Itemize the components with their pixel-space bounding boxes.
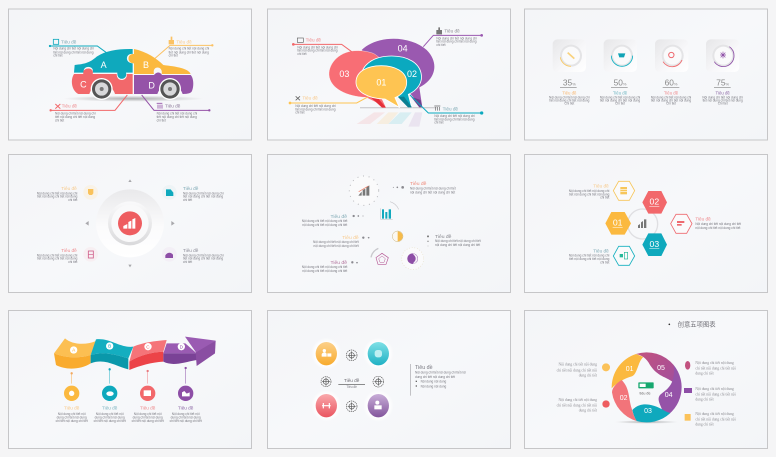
text top: chi tiết [600,196,609,200]
text top [569,184,610,200]
outline hexagon right [671,214,692,233]
callout 01: Tiêu đề [302,96,318,101]
card 50% [600,39,641,106]
text bottom: Tiêu đề [593,248,609,253]
pentagon icon [371,248,388,264]
hexagon 03 [642,233,667,256]
right item 3: dung chi tiết [695,423,714,427]
callout C: Tiêu đề [62,104,77,109]
callout 02: tiết nội dung chi tiết nội dung [434,117,475,121]
item 3 dots [362,236,369,239]
text bottom: Nội dung chi tiết nội dung chi [569,254,610,258]
item 1 text: nội dung chi tiết nội dung chi tiết [410,190,455,194]
moon icon [402,248,424,270]
right item 2: dung chi tiết [695,398,714,402]
item bottom-right [162,247,224,264]
text bottom [569,248,610,264]
text top: tiết nội dung chi tiết nội dung [569,192,610,196]
item 2 text: Nội dung chi tiết nội dung chi tiết [302,219,347,223]
item bottom-left: Tiêu đề [61,248,77,253]
right item 1: Nội dung chi tiết nội dung [695,361,734,365]
callout D [157,103,197,122]
card 35%: 35% [563,78,576,88]
item bottom-left: Nội dung chi tiết nội dung chi [37,253,78,257]
segment numbers: 01 [626,366,634,373]
right text block: Tiêu đề [415,365,433,371]
right item 2: Nội dung chi tiết nội dung [695,387,734,391]
item top-left: Tiêu đề [61,186,77,191]
item 3 text: nội dung chi tiết nội dung chi tiết [314,244,359,248]
callout C: Nội dung chi tiết nội dung chi [55,111,96,115]
callout 04: tiết nội dung chi tiết nội dung [436,40,477,44]
segment 04 [659,365,682,418]
left item 01: dung chi tiết [579,374,597,378]
card 60%: Chi tiết [666,102,676,106]
item 3 text: Tiêu đề [342,235,359,241]
car letters: C [80,79,87,89]
wheels [91,78,181,100]
step B: Tiêu đề [102,406,118,411]
text bottom: tiết nội dung chi tiết nội dung [569,257,610,261]
item top-left [37,185,98,202]
card 60% [651,39,692,106]
card 75%: tiết nội dung chi tiết nội dung [703,99,743,103]
callout A: tiết nội dung chi tiết nội dung [53,50,94,54]
bubble 01 [356,66,407,107]
item 5 text: Tiêu đề [331,260,347,266]
left item 02: Nội dung chi tiết nội dung [558,398,597,402]
leader dots [49,44,213,111]
item 4 text: nội dung chi tiết nội dung chi tiết [435,243,480,247]
ribbon segment D with arrow [163,337,216,366]
bars icon [381,202,399,219]
radar icon [392,231,403,242]
step B: chi tiết nội dung chi tiết [94,419,126,423]
callout 03: Tiêu đề [306,38,321,43]
callout D: Nội dung chi tiết nội dung chi [157,111,197,115]
callout B: Nội dung chi tiết nội dung chi [169,47,209,51]
hexagon 03: 03 [650,239,659,249]
segment numbers: 05 [657,365,665,372]
ribbon letters [70,342,185,354]
hexagon 02 [642,191,667,214]
card 75% [702,39,743,106]
item 5 text: Nội dung chi tiết nội dung chi tiết [302,265,347,269]
ball orange [311,338,342,370]
step A: Tiêu đề [64,406,80,411]
right text block: Nội dung nội dung [421,384,447,388]
step A: dung chi tiết nội dung [57,416,87,420]
leader lines [290,35,482,113]
callout 01: tiết nội dung chi tiết nội dung [295,107,336,111]
step A [56,372,88,423]
step C: Tiêu đề [140,406,156,411]
bubble numbers: 02 [407,69,417,79]
callout C [55,104,96,122]
item 4 text [427,234,481,247]
item bottom-right: tiết nội dung chi tiết nội dung [183,257,223,261]
step B: dung chi tiết nội dung [95,416,125,420]
text right: Tiêu đề [695,217,711,222]
callout B [169,37,209,58]
callout 04: Nội dung chi tiết nội dung chi [436,36,477,40]
ball purple [363,390,394,422]
callout D: chi tiết [157,118,166,122]
panel: glossy balls [311,338,466,422]
card 75%: Tiêu đề [716,90,730,95]
card 50%: Nội dung chi tiết nội dung chi [600,96,641,100]
car piece A [74,49,133,79]
callout 01 [295,96,336,115]
card 50%: Tiêu đề [613,90,628,95]
bubble numbers [339,44,417,88]
dotted circle chart [349,176,379,205]
text top: Nội dung chi tiết nội dung chi [569,189,610,193]
right item 1: chi tiết nội dung chi tiết nội [695,367,736,371]
card 75%: Nội dung chi tiết nội dung chi [702,96,743,100]
panel: speech bubbles [289,27,483,127]
chart heading: 创意五项图表 [678,320,716,329]
item 4 text: Tiêu đề [435,234,452,240]
ribbon segment B [91,339,133,369]
segment numbers: 03 [644,408,652,415]
segment numbers: 04 [665,392,673,399]
ribbon segment A [54,338,96,369]
step D [170,367,202,423]
item 1 text: Nội dung chi tiết nội dung chi tiết [410,186,456,190]
ball red [311,390,342,422]
bubble numbers: 04 [398,44,408,54]
segment numbers: 02 [620,395,628,402]
right item 1 [685,361,736,376]
callout 02 [434,106,475,125]
bubble 04 [362,39,434,107]
step C [132,370,164,423]
callout C: chi tiết [55,118,64,122]
step C: Nội dung chi tiết nội [134,412,162,416]
leader lines [50,45,212,110]
left item 01: Nội dung chi tiết nội dung [558,363,597,367]
dashed connector icons [321,350,384,412]
center chart and ring [628,209,658,239]
center title: Tiêu đề [346,385,357,389]
segment 05 [636,352,675,382]
car piece B [128,49,191,74]
bubble reflections [357,107,437,127]
item top-right [162,185,224,202]
callout D: tiết nội dung chi tiết nội dung [157,115,197,119]
step D: chi tiết nội dung chi tiết [170,419,202,423]
callout 03: chi tiết [297,52,307,56]
bubble numbers: 03 [339,69,349,79]
item 3 text [313,235,359,248]
right text block: Nội dung nội dung [421,380,447,384]
callout 04: Tiêu đề [444,29,460,34]
callout 03: tiết nội dung chi tiết nội dung [297,49,338,53]
step C: dung chi tiết nội dung [133,416,163,420]
text bottom: chi tiết [600,260,609,264]
item top-right: chi tiết [183,198,192,202]
left item 01: chi tiết nội dung chi tiết nội [557,369,597,373]
callout 02: Nội dung chi tiết nội dung chi [434,114,475,118]
item top-right: tiết nội dung chi tiết nội dung [183,195,223,199]
card 50%: tiết nội dung chi tiết nội dung [600,99,640,103]
bubble 02 [362,56,421,107]
right item 2: chi tiết nội dung chi tiết nội [695,393,736,397]
right text block: Nội dung chi tiết nội dung chi tiết nội [415,371,466,375]
red tail edge [370,97,386,108]
item 3 text: Nội dung chi tiết nội dung chi tiết [313,240,359,244]
outline hexagon top [613,181,635,200]
panel: hexagons [569,181,741,265]
item 1 text [410,181,456,194]
callout D: Tiêu đề [165,104,181,109]
callout 02: chi tiết [434,121,444,125]
ribbon letters: B [108,344,111,349]
callout 04 [436,27,477,47]
callout A: Tiêu đề [61,40,77,45]
item top-left: tiết nội dung chi tiết nội dung [37,195,78,199]
right text block [410,364,466,396]
item 2 text [302,214,347,227]
item 1 dots [393,186,404,189]
hexagon 01: 01 [613,217,623,227]
hexagon 02: 02 [650,197,659,207]
callout 01: chi tiết [295,111,305,115]
center title [338,378,365,389]
teal tail edge [398,97,412,107]
right item 3 [685,412,736,427]
item 5 dots [351,261,358,263]
panel: scattered icons [302,176,481,273]
segment numbers [620,365,673,415]
right text block: dung chi tiết nội dung chi tiết [415,375,455,379]
card 35%: tiết nội dung chi tiết nội dung [549,99,590,103]
segment 02 [612,380,637,421]
step D: dung chi tiết nội dung [171,416,201,420]
step A: chi tiết nội dung chi tiết [56,419,88,423]
item top-right: Nội dung chi tiết nội dung chi [183,191,224,195]
bubble 03 [329,51,387,107]
callout C: tiết nội dung chi tiết nội dung [55,115,95,119]
card 35%: Nội dung chi tiết nội dung chi [549,96,590,100]
card 35%: Tiêu đề [562,90,577,95]
callout B: chi tiết [169,54,178,58]
right item 1: dung chi tiết [695,372,714,376]
card 60%: Tiêu đề [664,90,679,95]
item 5 text: nội dung chi tiết nội dung chi tiết [302,269,347,273]
right item 3: Nội dung chi tiết nội dung [695,412,734,416]
step A: Nội dung chi tiết nội [58,412,86,416]
panel: puzzle car [49,37,213,122]
card 60%: tiết nội dung chi tiết nội dung [651,99,691,103]
callout 03 [297,38,338,56]
card 50%: 50% [614,78,627,88]
panel: central hub [37,179,224,267]
hexagon 01 [605,212,631,235]
ribbon letters: A [72,348,76,353]
item bottom-right: Tiêu đề [183,248,199,253]
callout 02: Tiêu đề [443,107,458,112]
outline hexagon bottom [613,246,635,265]
step B: Nội dung chi tiết nội [96,412,124,416]
left item 02 [557,398,610,413]
step C: chi tiết nội dung chi tiết [132,419,164,423]
right item 3: chi tiết nội dung chi tiết nội [695,418,736,422]
panel: percentage cards [549,39,743,106]
card 60%: Nội dung chi tiết nội dung chi [651,96,692,100]
left item 02: chi tiết nội dung chi tiết nội [557,404,597,408]
text top: Tiêu đề [593,184,609,189]
center title: Tiêu đề [344,378,360,383]
hub circles [96,189,164,257]
car piece C [72,68,133,94]
item bottom-left [37,247,98,264]
card 50%: Chi tiết [615,102,625,106]
callout 04: chi tiết [436,43,446,47]
card 35% [549,39,590,106]
car shadow [63,96,203,102]
item bottom-right: Nội dung chi tiết nội dung chi [183,253,224,257]
item top-right: Tiêu đề [183,186,199,191]
item 2 dots [352,215,363,217]
item top-left: Nội dung chi tiết nội dung chi [37,191,78,195]
chart heading [668,320,716,329]
step D: Nội dung chi tiết nội [172,412,200,416]
step B [94,368,126,423]
car piece D [134,72,193,94]
callout 01: Nội dung chi tiết nội dung chi [295,104,336,108]
ribbon letters: D [180,344,184,349]
item 2 text: Tiêu đề [331,214,347,220]
card 75%: Chi tiết [718,102,728,106]
ball teal [363,338,394,370]
car letters: A [101,60,107,70]
center icon and label: tiêu đề [640,392,650,396]
card 75%: 75% [716,78,730,88]
item top-left: chi tiết [68,198,77,202]
callout B: tiết nội dung chi tiết nội dung [169,50,209,54]
left item 02: dung chi tiết [579,409,597,413]
left item 01 [557,363,610,378]
item 4 text: Nội dung chi tiết nội dung chi tiết [435,239,481,243]
item bottom-left: tiết nội dung chi tiết nội dung [37,257,78,261]
leader dots [289,34,483,115]
ribbon segment C [129,340,167,370]
car letters [80,60,155,91]
chart shadow [615,420,678,424]
purple tail edge [411,97,422,107]
item 5 text [302,260,347,273]
direction arrows [85,179,175,267]
text right [695,217,741,230]
segment 03 [632,404,670,422]
item bottom-right: chi tiết [183,260,192,264]
card 35%: Chi tiết [564,102,574,106]
callout A: Nội dung chi tiết nội dung chi [53,47,94,51]
car letters: B [143,60,149,70]
panel: ribbon arrow [54,337,216,423]
panel: five-item star chart [557,320,736,427]
text right: Nội dung chi tiết nội dung chi tiết [695,222,741,226]
center icon and label [638,382,654,396]
item 1 text: Tiêu đề [410,181,427,187]
ribbon letters: C [146,344,150,349]
callout A: chi tiết [53,54,63,58]
item 2 text: nội dung chi tiết nội dung chi tiết [302,223,347,227]
step D: Tiêu đề [178,406,194,411]
item bottom-left: chi tiết [68,260,77,264]
right item 2 [684,387,736,402]
segment 01 [612,354,643,388]
card 60%: 60% [665,78,678,88]
car letters: D [148,81,155,91]
callout A [53,39,94,58]
callout B: Tiêu đề [176,40,192,45]
callout 03: Nội dung chi tiết nội dung chi [297,45,338,49]
bubble numbers: 01 [376,78,386,88]
text right: nội dung chi tiết nội dung chi tiết [695,226,741,230]
